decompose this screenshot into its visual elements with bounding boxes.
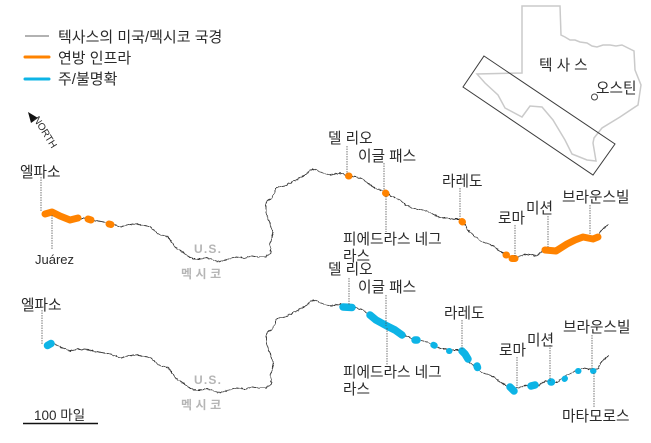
blue segments	[48, 307, 594, 391]
legend: federal infrastructure: 연방 인프라	[58, 50, 131, 67]
US Mexico labels bottom: 멕시코	[181, 398, 225, 412]
legend: federal infrastructure	[25, 50, 131, 67]
labels bottom	[21, 261, 631, 425]
labels top: 라스	[343, 248, 370, 265]
labels bottom: 마타모로스	[562, 408, 630, 425]
legend	[25, 29, 222, 88]
labels bottom: 로마	[499, 342, 527, 359]
labels top: 이글 패스	[358, 148, 416, 165]
legend: state/illegal: 주/불명확	[58, 71, 118, 88]
bottom map: state / unknown	[21, 261, 631, 425]
orange segments	[45, 176, 598, 258]
labels bottom: 델 리오	[328, 261, 373, 278]
labels top: 엘파소	[20, 164, 61, 181]
labels bottom: 라레도	[444, 305, 485, 322]
study area rectangle	[463, 56, 615, 175]
north arrow: NORTH	[30, 115, 59, 151]
scale bar: 100 마일	[34, 408, 85, 423]
US Mexico labels top: 멕시코	[181, 267, 225, 281]
labels bottom: 엘파소	[21, 297, 62, 314]
leader lines bottom	[42, 278, 594, 408]
label: Austin: 오스틴	[596, 80, 637, 97]
labels top: 라레도	[442, 173, 483, 190]
border line bottom	[52, 300, 608, 393]
labels top	[20, 130, 630, 267]
US Mexico labels bottom	[181, 373, 225, 412]
austin marker	[592, 94, 598, 100]
labels top: Juárez	[35, 252, 74, 267]
US Mexico labels top	[181, 242, 225, 281]
labels bottom: 이글 패스	[358, 279, 416, 296]
legend: border line: 텍사스의 미국/멕시코 국경	[58, 29, 222, 46]
labels top: 브라운스빌	[562, 189, 630, 206]
labels bottom: 피에드라스 네그	[343, 364, 442, 381]
labels top: 델 리오	[328, 130, 373, 147]
labels bottom: 브라운스빌	[563, 319, 631, 336]
US Mexico labels top: U.S.	[194, 242, 222, 256]
labels top: 로마	[498, 210, 526, 227]
labels top: 피에드라스 네그	[343, 231, 442, 248]
leader lines top	[41, 146, 590, 256]
labels bottom: 미션	[527, 332, 554, 349]
label: Texas: 텍 사 스	[539, 57, 588, 74]
texas outline	[477, 6, 641, 161]
labels top: 미션	[526, 200, 553, 217]
top map: federal infrastructure	[20, 130, 630, 281]
labels bottom: 라스	[343, 381, 370, 398]
scale bar	[23, 408, 98, 424]
legend: state/illegal	[25, 71, 118, 88]
border line top	[52, 169, 608, 262]
locator map of Texas	[463, 6, 641, 175]
US Mexico labels bottom: U.S.	[194, 373, 222, 387]
